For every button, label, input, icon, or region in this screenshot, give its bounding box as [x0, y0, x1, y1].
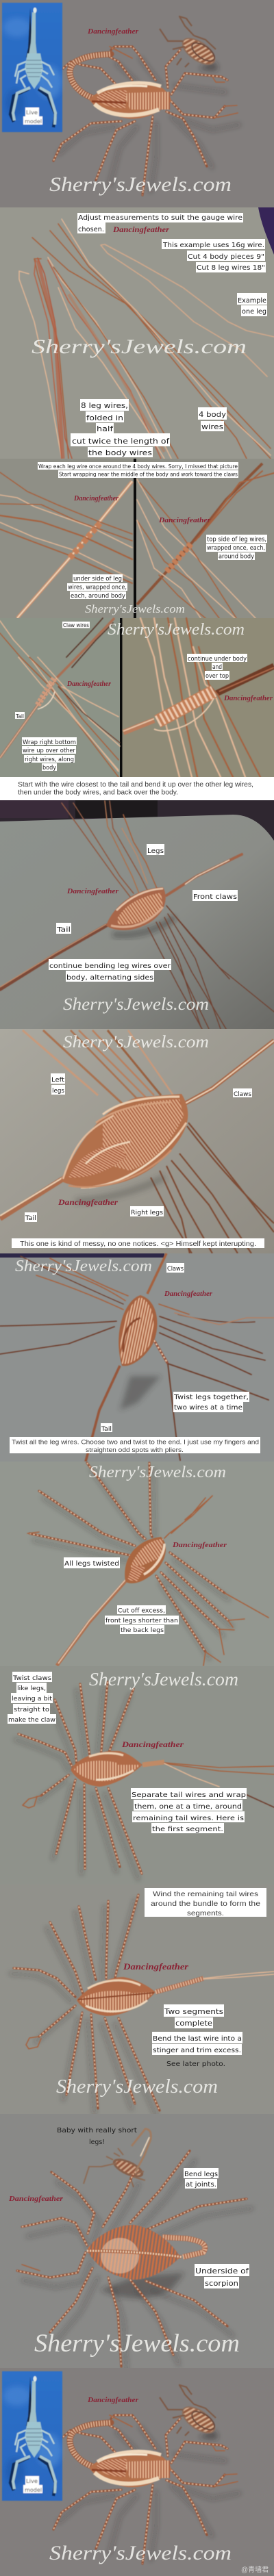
label: front claws: Front claws	[193, 893, 237, 901]
source handle: @青墙君	[241, 2565, 269, 2574]
label: bend legs: Bend legs	[184, 2171, 218, 2178]
credit: Dancingfeather	[87, 27, 139, 36]
label: example wire sizes: Cut 8 leg wires 18"	[197, 264, 265, 272]
label: bend the last wire	[152, 2032, 242, 2055]
label: tail	[101, 1423, 112, 1433]
watermark: Sherry'sJewels.com	[89, 1669, 238, 1689]
caption: wrap each leg wire	[38, 462, 238, 478]
label: wrap right bottom wire: Wrap right bottom	[23, 739, 76, 746]
label: continue under body: over top	[206, 673, 229, 680]
caption band: start with the wire: Start with the wire closest to the tail and bend it up over the other leg wires,	[18, 781, 253, 789]
credit: Dancingfeather	[164, 1290, 212, 1298]
label: separate tail wires: Separate tail wires and wrap	[132, 1791, 246, 1799]
label: all legs twisted: All legs twisted	[64, 1560, 119, 1568]
label: 8 leg wires: the body wires	[88, 448, 152, 457]
label: under side: each, around body	[71, 593, 125, 600]
paper backdrop	[0, 815, 274, 1029]
photo: under side wraps	[0, 472, 132, 618]
label: 8 leg wires: cut twice the length of	[72, 437, 170, 446]
label: underside: scorpion	[205, 2280, 238, 2288]
caption band: start with the wire	[0, 777, 274, 800]
label: twist claws: make the claw	[8, 1717, 55, 1724]
watermark: Sherry'sJewels.com	[63, 995, 209, 1014]
label: example wire sizes: Cut 4 body pieces 9"	[188, 253, 264, 261]
caption band: start with the wire: then under the body wires, and back over the body.	[18, 789, 178, 797]
note: see later photo: See later photo.	[166, 2061, 225, 2068]
photo: wire scorpion	[53, 2385, 240, 2564]
label: wrap right bottom wire	[22, 737, 77, 771]
label: claws: Claws	[167, 1266, 184, 1273]
label: top side: wrapped once, each,	[207, 545, 265, 552]
watermark: Sherry'sJewels.com	[89, 1464, 226, 1481]
panel 6: close-up weave	[0, 1029, 274, 1253]
credit: Dancingfeather	[87, 2396, 139, 2404]
label: left legs: Left	[51, 1077, 65, 1084]
label: separate tail wires	[131, 1788, 247, 1833]
label: 8 leg wires: half	[97, 424, 114, 433]
label: example one leg	[237, 293, 267, 316]
scorpion in progress	[0, 801, 274, 1029]
label: twist claws	[8, 1672, 56, 1724]
label: 8 leg wires: folded in	[86, 413, 123, 422]
label: top side	[206, 535, 267, 560]
label: two segments	[164, 2004, 224, 2028]
label: twist legs	[173, 1392, 249, 1412]
panel 4: wrapping toward claws, two photos	[0, 618, 274, 777]
credit: Dancingfeather	[112, 225, 169, 234]
label: tail: Tail	[101, 1426, 112, 1433]
panel 3: first wraps, two photos	[0, 459, 274, 618]
label: adjust measurements	[77, 213, 243, 233]
label: legs: Legs	[147, 847, 164, 855]
label: top side: top side of leg wires,	[207, 537, 266, 544]
caption: wrap each leg wire: Wrap each leg wire once around the 4 body wires. Sorry, I missed that picture	[38, 463, 238, 470]
caption: wrap each leg wire: Start wrapping near the middle of the body and work toward the claws	[59, 471, 238, 478]
caption: twist all: Twist all the leg wires. Choose two and twist to the end. I just use my fingers and	[12, 1439, 259, 1446]
label: left legs	[51, 1073, 65, 1095]
label: top side: around body	[219, 553, 254, 560]
caption: wind the remaining: around the bundle to form the	[151, 1900, 260, 1908]
label: underside	[195, 2264, 249, 2288]
panel 7: twist legs together	[0, 1253, 274, 1462]
label: tail	[25, 1212, 37, 1222]
example leg wire	[101, 244, 274, 377]
divider	[120, 618, 122, 777]
underside scorpion	[17, 2151, 252, 2376]
panel 2: cut wires	[0, 207, 274, 459]
credit: Dancingfeather	[121, 1739, 184, 1749]
label: claws	[233, 1088, 252, 1098]
watermark: Sherry'sJewels.com	[108, 621, 245, 639]
caption: twist all: straighten odd spots with pliers.	[86, 1446, 184, 1454]
credit: Dancingfeather	[66, 887, 119, 895]
panel 5: bending leg wires on paper	[0, 800, 274, 1029]
label: continue under body: and	[212, 664, 222, 671]
credit: Dancingfeather	[123, 1961, 189, 1972]
photo: live scorpion on blue	[2, 3, 62, 132]
credit left: Dancingfeather	[66, 680, 111, 688]
label: legs	[147, 844, 164, 855]
label: cut off excess: front legs shorter than	[105, 1618, 178, 1624]
label: cut off excess: the back legs	[121, 1627, 164, 1634]
watermark: Sherry'sJewels.com	[49, 2542, 232, 2564]
label: two segments: complete	[175, 2019, 212, 2028]
scorpion twisted legs	[27, 1463, 269, 1666]
caption: wind the remaining: Wind the remaining tail wires	[153, 1890, 258, 1898]
photo: live scorpion on blue	[2, 2371, 62, 2501]
label: tail: Tail	[15, 713, 24, 719]
caption: wind the remaining	[145, 1888, 266, 1917]
scorpion close-up	[0, 1030, 274, 1253]
label: front claws	[192, 890, 238, 901]
folded leg wires	[19, 271, 62, 459]
label: separate tail wires: remaining tail wires. Here is	[133, 1815, 244, 1822]
watermark: Sherry'sJewels.com	[56, 2076, 218, 2097]
label: bend legs	[184, 2168, 219, 2189]
label: two segments: Two segments	[164, 2007, 223, 2016]
label: twist claws: straight to	[14, 1707, 50, 1713]
scorpion with first segment	[15, 1682, 274, 1879]
purple cloth corner	[258, 207, 274, 255]
label: example one leg: one leg	[242, 308, 266, 316]
label: twist claws: like legs,	[17, 1685, 46, 1692]
credit left: Dancingfeather	[73, 495, 119, 502]
label: wrap right bottom wire: right wires, along	[25, 756, 74, 763]
label: separate tail wires: them, one at a time, around	[134, 1803, 242, 1811]
credit: Dancingfeather	[58, 1197, 118, 1207]
label: bend the last wire: Bend the last wire into a	[153, 2035, 242, 2043]
panel 1: finished scorpion with live model	[0, 0, 274, 207]
label: under side: wires, wrapped once,	[68, 585, 127, 591]
label: tail	[56, 923, 71, 934]
label: adjust measurements: Adjust measurements to suit the gauge wire	[78, 214, 242, 222]
panel 10: two segments complete	[0, 1885, 274, 2116]
caption: wind the remaining: segments.	[187, 1909, 224, 1917]
photo: top side wraps	[137, 463, 274, 618]
note: baby with short legs: legs!	[89, 2139, 105, 2146]
watermark: Sherry'sJewels.com	[34, 2330, 240, 2358]
note: baby with short legs: Baby with really short	[57, 2127, 137, 2134]
label: example wire sizes	[162, 239, 266, 272]
panel 9: twist claws, first segment	[0, 1666, 274, 1885]
label: wrap right bottom wire: wire up over other	[23, 748, 75, 754]
label: claws	[166, 1263, 184, 1273]
label: separate tail wires: the first segment.	[152, 1826, 223, 1833]
photo: wire scorpion	[53, 16, 240, 195]
label: bend the last wire: stinger and trim excess.	[153, 2047, 241, 2054]
label: left legs: legs	[52, 1088, 64, 1095]
credit: Dancingfeather	[172, 1541, 227, 1549]
label: adjust measurements: chosen.	[78, 226, 104, 233]
scorpion with wires	[0, 1253, 274, 1462]
label: 4 body wires: 4 body	[199, 410, 227, 419]
label: twist legs: two wires at a time	[174, 1404, 242, 1412]
label: cut off excess	[105, 1605, 179, 1634]
photo: wrap bottom wire	[0, 618, 120, 777]
label: twist claws: leaving a bit	[12, 1696, 52, 1703]
credit right: Dancingfeather	[158, 516, 211, 524]
label: 4 body wires: wires	[201, 422, 223, 431]
caption: twist all	[10, 1437, 260, 1454]
credit right: Dancingfeather	[223, 695, 273, 702]
label: example one leg: Example	[238, 297, 266, 305]
divider	[134, 459, 136, 618]
label: continue under body: continue under body	[188, 656, 247, 663]
label: twist legs: Twist legs together,	[173, 1394, 249, 1401]
label: continue bending: body, alternating sides	[66, 974, 153, 982]
label: right legs	[130, 1206, 164, 1216]
label: claws: Claws	[234, 1091, 252, 1098]
photo: continue under body	[123, 618, 274, 777]
label: under side: under side of leg	[73, 576, 122, 583]
watermark: Sherry'sJewels.com	[32, 335, 247, 358]
label: under side	[67, 574, 127, 600]
caption: messy: This one is kind of messy, no one notices. <g> Himself kept interupting.	[20, 1240, 256, 1248]
label: tail: Tail	[56, 926, 71, 934]
credit: Dancingfeather	[8, 2195, 64, 2203]
label: all legs twisted	[64, 1557, 120, 1568]
label: example wire sizes: This example uses 16g wire.	[162, 242, 264, 249]
label: bend legs: at joints.	[186, 2181, 216, 2189]
watermark: Sherry'sJewels.com	[85, 602, 185, 615]
note: baby with short legs	[57, 2127, 137, 2146]
label: 8 leg wires	[71, 399, 170, 457]
label: claw wires: Claw wires	[63, 622, 89, 628]
label: twist claws: Twist claws	[12, 1675, 51, 1682]
label: continue bending	[49, 959, 171, 982]
panel 12: finished scorpion repeated	[0, 2368, 274, 2576]
label: cut off excess: Cut off excess,	[118, 1607, 165, 1614]
label: 4 body wires	[198, 407, 227, 431]
watermark: Sherry'sJewels.com	[15, 1258, 152, 1275]
caption: messy	[12, 1238, 264, 1248]
panel 8: all legs twisted	[0, 1462, 274, 1666]
baby scorpion	[84, 2129, 151, 2187]
label: continue under body	[187, 654, 247, 680]
panel 11: underside of scorpion with baby	[0, 2114, 274, 2376]
label: continue bending: continue bending leg wires over	[49, 962, 171, 970]
label: right legs: Right legs	[131, 1210, 163, 1216]
scorpion with two segments	[10, 1895, 274, 2116]
label: tail: Tail	[25, 1215, 36, 1222]
watermark: Sherry'sJewels.com	[49, 173, 232, 196]
label: underside: Underside of	[195, 2267, 249, 2275]
label: wrap right bottom wire: body	[42, 765, 56, 771]
body wires	[19, 219, 274, 459]
label: 8 leg wires: 8 leg wires,	[81, 401, 128, 410]
watermark: Sherry'sJewels.com	[63, 1033, 209, 1051]
